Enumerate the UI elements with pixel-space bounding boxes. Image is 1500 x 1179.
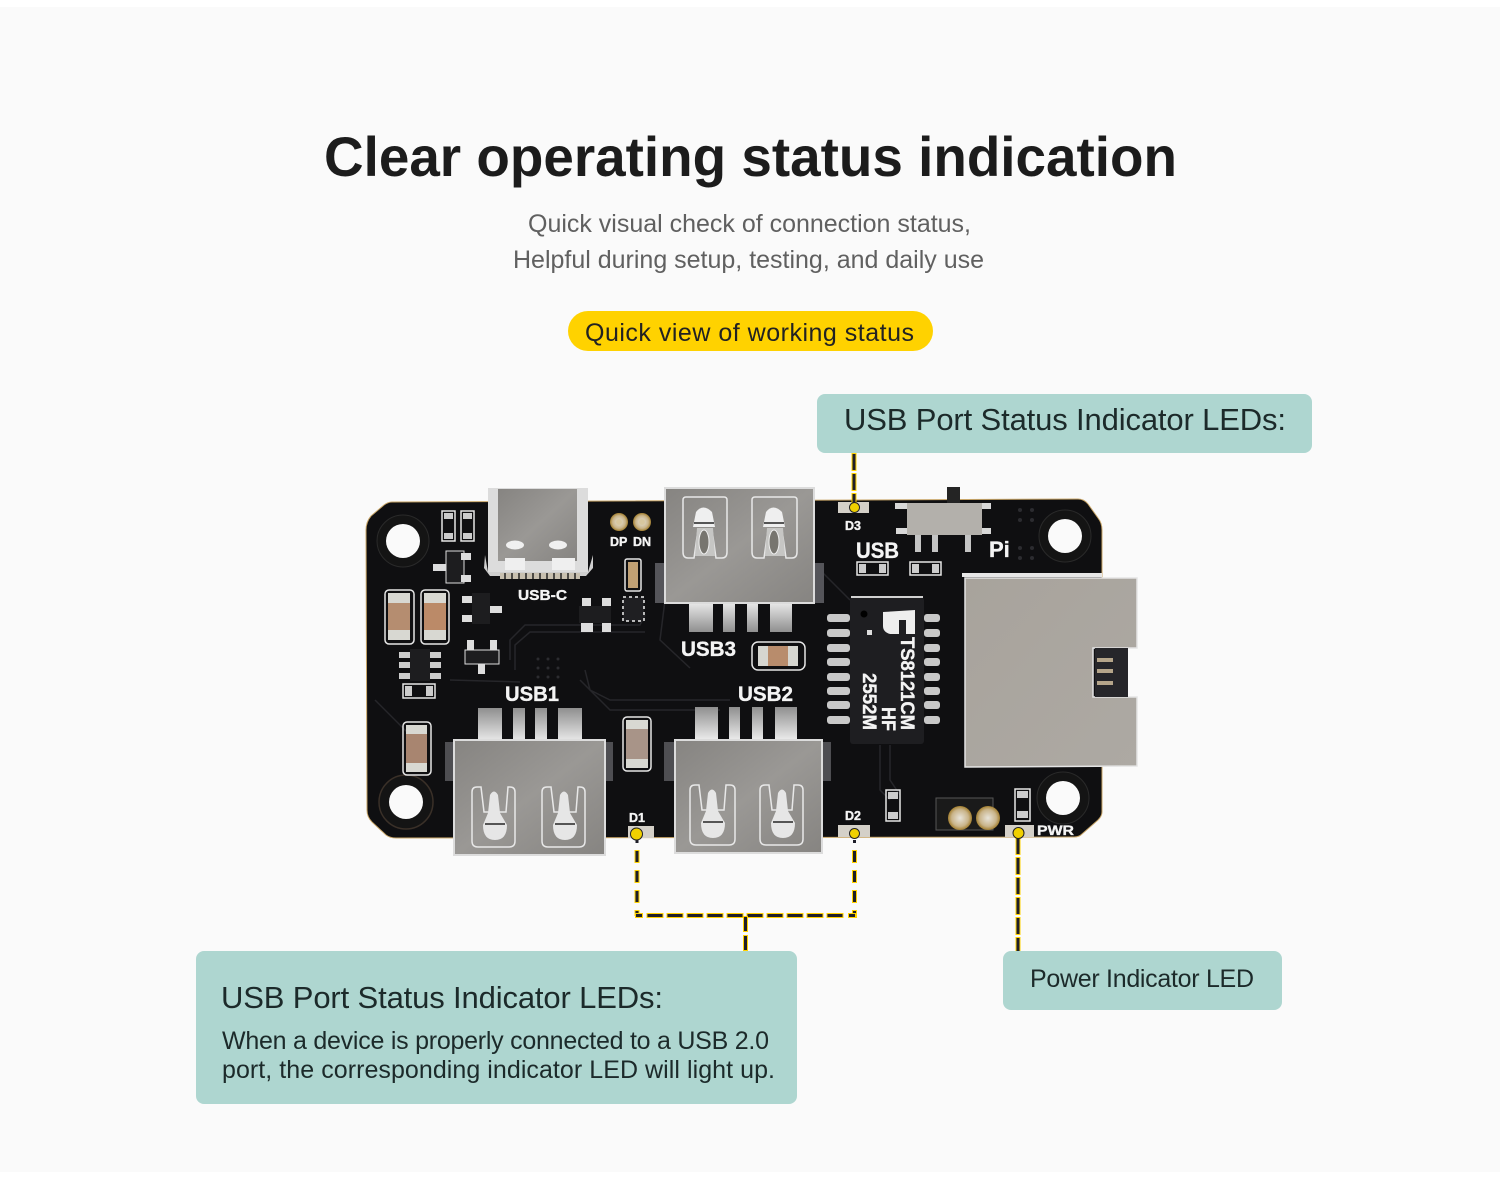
subtitle — [513, 210, 984, 274]
callout: bottom USB LEDs — [196, 951, 797, 1104]
left side capacitors — [385, 559, 651, 775]
small ICs and resistors — [399, 511, 1030, 821]
label: USB2: USB2 — [738, 683, 793, 706]
circuit board — [366, 487, 1137, 855]
USB1 connector — [445, 708, 613, 855]
via grid — [536, 508, 1034, 678]
transformer chip: HF — [877, 707, 898, 731]
subtitle: Helpful during setup, testing, and daily use — [513, 246, 984, 274]
label: Pi switch position: Pi — [989, 537, 1010, 562]
transformer chip: 2552M — [858, 673, 879, 730]
callout: bottom USB LEDs: USB Port Status Indicator LEDs: — [221, 980, 663, 1015]
transformer chip — [827, 596, 940, 744]
label: USB switch position: USB — [856, 538, 899, 563]
callout: bottom USB LEDs: When a device is properly connected to a USB 2.0 — [222, 1027, 769, 1055]
USB3 connector — [655, 488, 824, 632]
test pads DP and DN: DP — [610, 535, 627, 549]
LED pads with labels: D3 — [845, 519, 861, 533]
callout: bottom USB LEDs: port, the corresponding indicator LED will light up. — [222, 1056, 775, 1084]
gold contact pads — [936, 798, 1000, 830]
label: USB1: USB1 — [505, 683, 559, 706]
board outline — [366, 499, 1102, 838]
LED pads with labels: PWR — [1037, 823, 1074, 838]
dashed connector: D1 and D2 — [630, 828, 860, 951]
LED pads with labels — [628, 502, 1074, 838]
test pads DP and DN — [610, 513, 651, 549]
LED pads with labels: D1 — [629, 811, 645, 825]
label: USB-C: USB-C — [518, 588, 568, 604]
label: USB3: USB3 — [681, 638, 736, 661]
LED pads with labels: D2 — [845, 809, 861, 823]
dashed connector: power LED — [1013, 828, 1024, 952]
subtitle: Quick visual check of connection status, — [528, 210, 971, 238]
callout: power LED: Power Indicator LED — [1030, 965, 1254, 993]
USB2 connector — [664, 707, 831, 853]
ethernet connector — [962, 573, 1137, 767]
slide switch — [895, 487, 991, 552]
ceramic capacitor near USB3 — [752, 642, 805, 670]
callout: top USB LEDs: USB Port Status Indicator LEDs: — [844, 402, 1286, 437]
copper traces — [375, 570, 900, 800]
USB-C connector — [484, 488, 593, 579]
callout: power LED — [1003, 951, 1282, 1010]
dashed connector: top LED — [850, 453, 860, 512]
mounting holes — [377, 510, 1091, 829]
test pads DP and DN: DN — [633, 535, 651, 549]
callout: top USB LEDs — [817, 394, 1312, 453]
transformer chip: TS8121CM — [896, 637, 917, 730]
badge: quick view: Quick view of working status — [585, 319, 914, 347]
title: Clear operating status indication — [324, 125, 1177, 188]
badge: quick view — [568, 311, 933, 351]
